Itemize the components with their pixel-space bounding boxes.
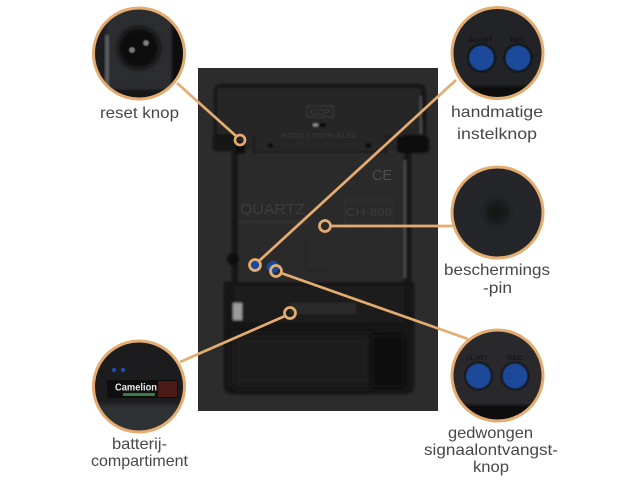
panel: clock back photo: CCP (310, 108, 330, 117)
label: gedwongen signaalontvangstknop: knop (473, 459, 509, 476)
circle: handmatige instelknop: REC (510, 38, 527, 44)
circle: signaalontvangstknop (450, 328, 546, 424)
circle: batterijcompartiment (90, 338, 190, 436)
panel: clock back photo (198, 68, 438, 411)
label: beschermingspin (444, 262, 550, 297)
label: batterijcompartiment (91, 436, 189, 470)
connector: beschermingspin (320, 220, 454, 232)
label: beschermingspin: -pin (483, 280, 512, 297)
circle: handmatige instelknop (450, 5, 546, 102)
label: gedwongen signaalontvangstknop: gedwongen (448, 425, 533, 442)
connector: signaalontvangstknop (270, 266, 468, 339)
label: gedwongen signaalontvangstknop (424, 425, 558, 476)
infographic (92, 6, 558, 476)
label: handmatige instelknop (451, 104, 543, 143)
connector: batterijcompartiment (180, 308, 296, 362)
label: batterijcompartiment: batterij- (112, 436, 167, 453)
circle: signaalontvangstknop: REC (507, 356, 524, 362)
label: handmatige instelknop: instelknop (457, 126, 537, 143)
panel text: quartz: QUARTZ (240, 201, 305, 218)
label: gedwongen signaalontvangstknop: signaalontvangst- (424, 442, 558, 459)
button labels: ALART (469, 38, 493, 44)
small parts (268, 143, 273, 148)
upper plate (217, 88, 423, 150)
panel: clock back photo: CE (372, 167, 392, 184)
label: handmatige instelknop: handmatige (451, 104, 543, 121)
battery brand: Camelion (115, 382, 157, 394)
panel: clock back photo: CH-899 (346, 207, 392, 219)
label: batterijcompartiment: compartiment (91, 453, 189, 470)
latches (212, 136, 232, 152)
panel: clock back photo: RADIO CONTROLLED (281, 133, 357, 140)
circle: reset knop (92, 6, 186, 100)
recess (214, 84, 426, 394)
battery bay (234, 286, 404, 322)
connector: handmatige instelknop (250, 80, 456, 270)
label: beschermingspin: beschermings (444, 262, 550, 279)
circle: beschermingspin (450, 165, 546, 261)
connector: reset knop (177, 83, 245, 145)
button labels: ALART (466, 356, 488, 362)
label: reset knop: reset knop (100, 105, 179, 122)
